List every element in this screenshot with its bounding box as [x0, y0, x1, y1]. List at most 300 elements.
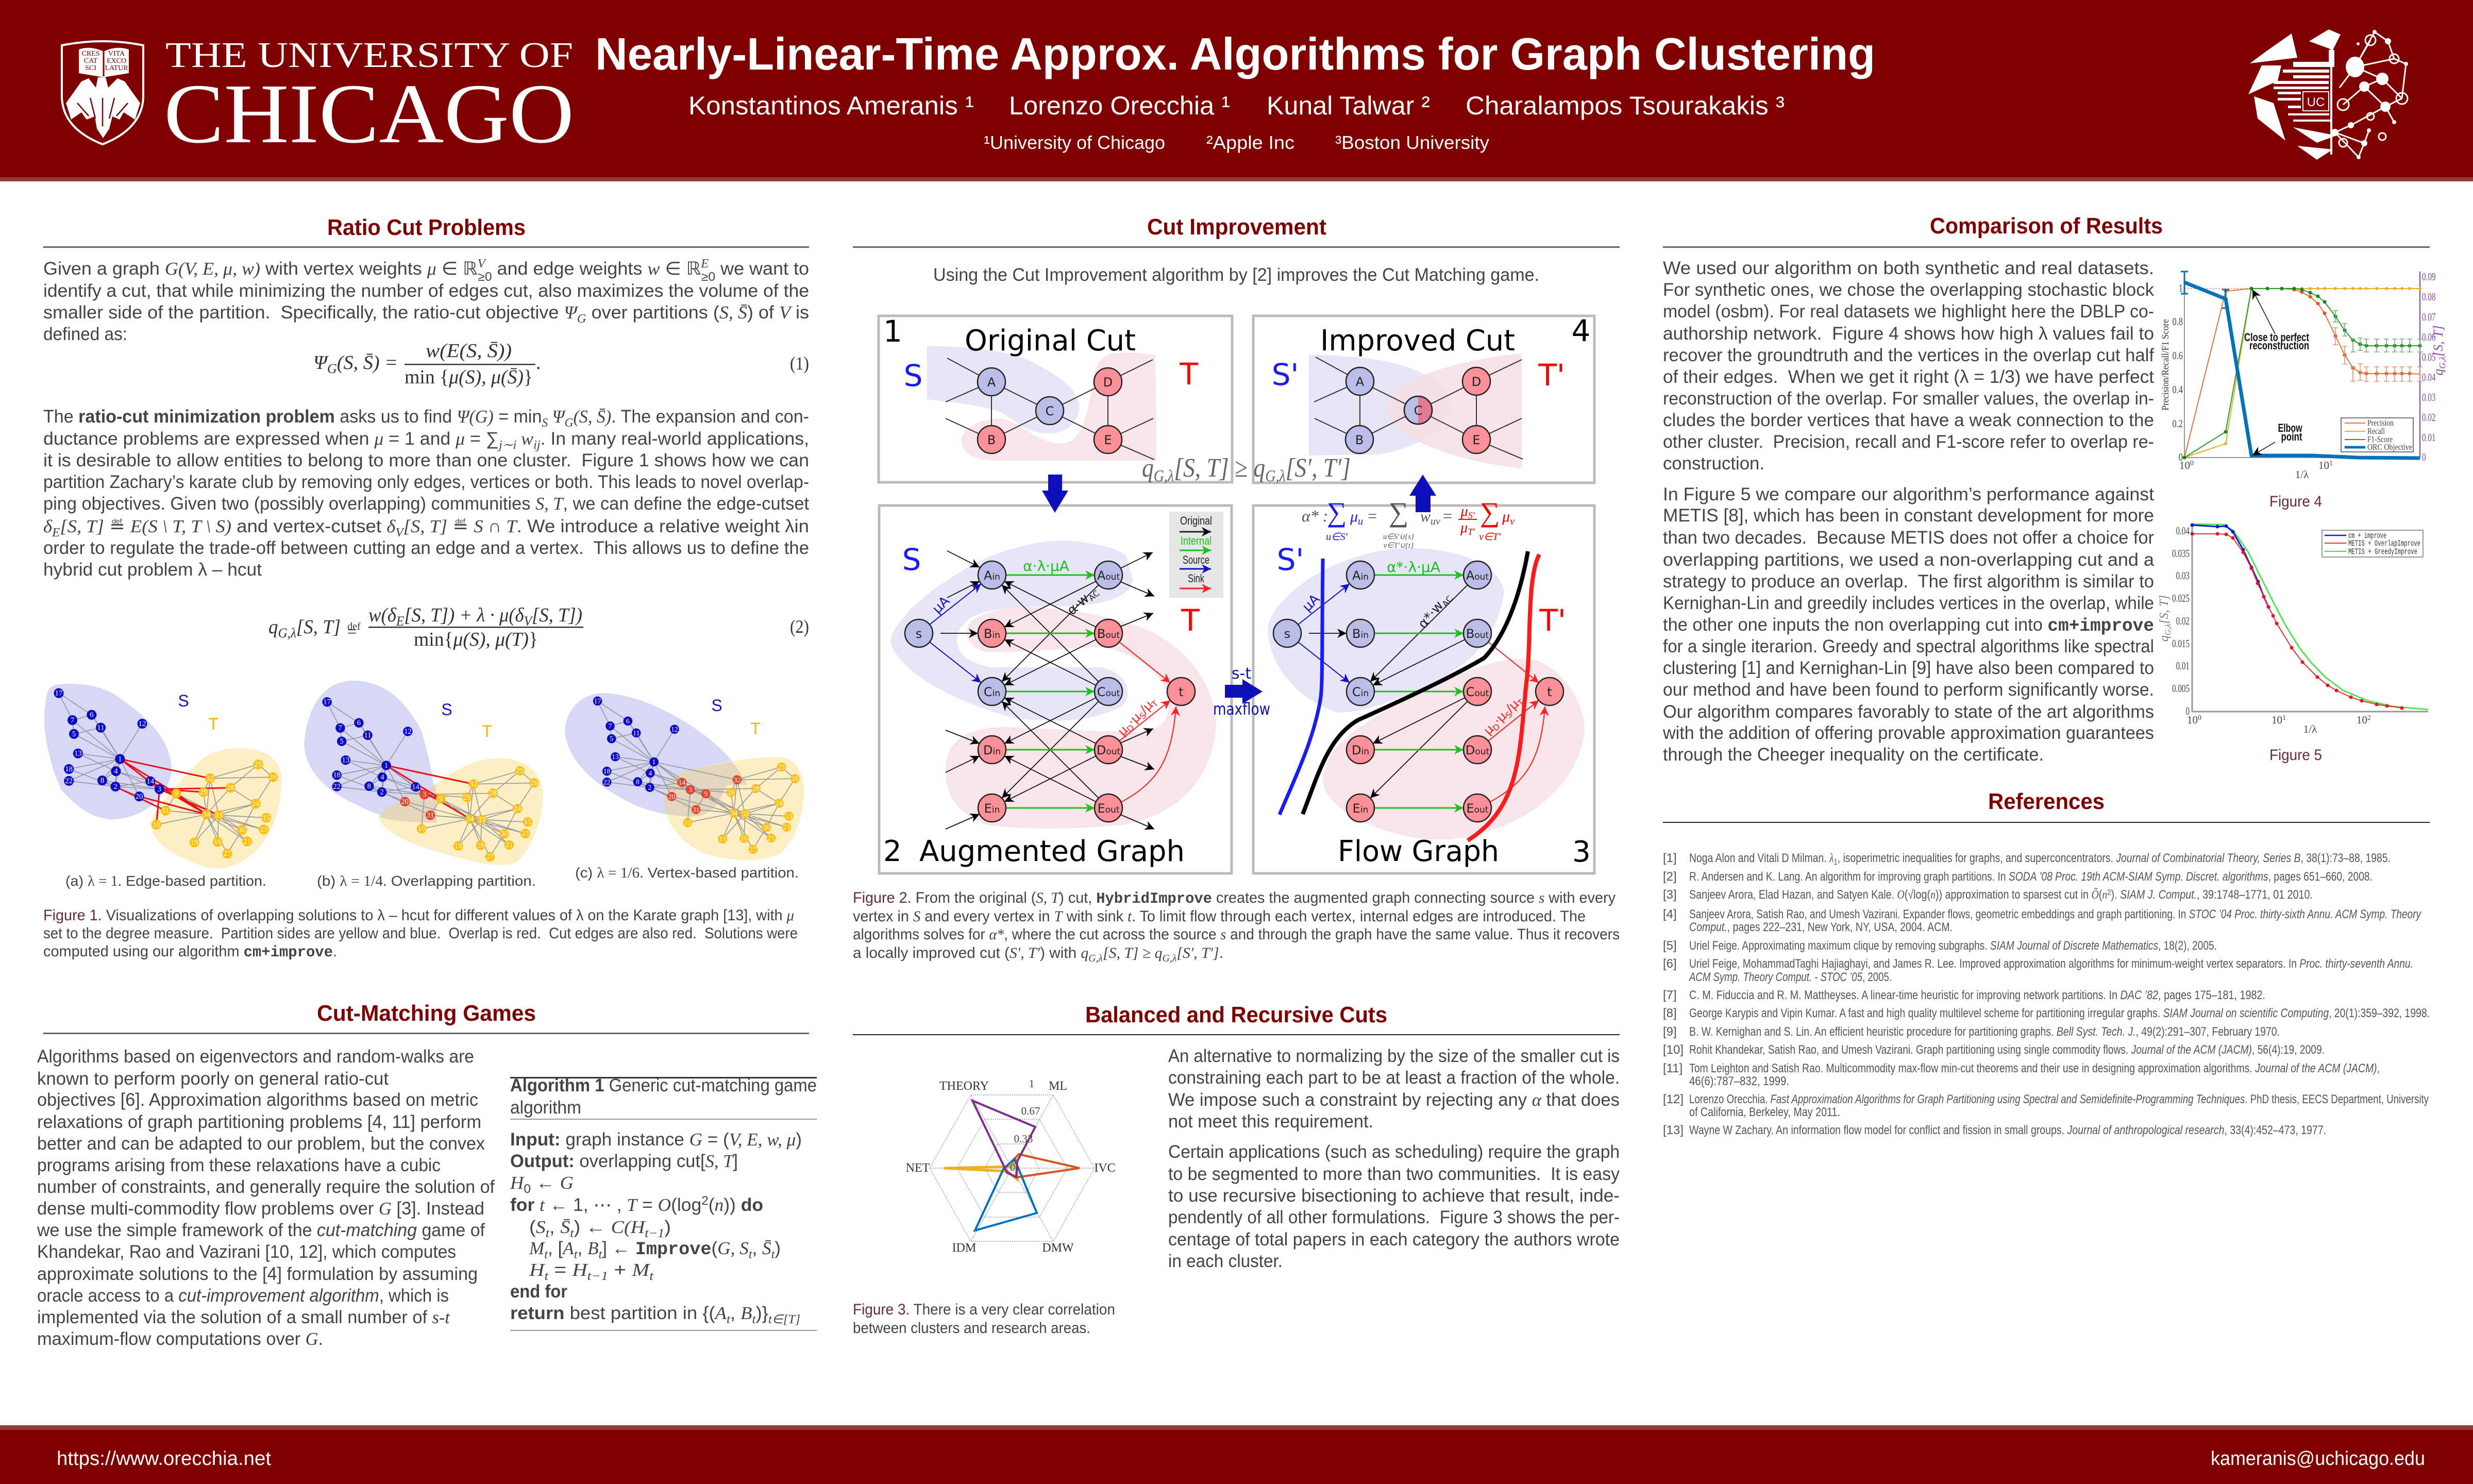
text block: intro paragraph: G — [577, 312, 586, 326]
diagram: flow graph: Dout — [1466, 743, 1489, 757]
radar chart: THEORY — [939, 1080, 989, 1093]
text block: cut-matching description: we use the simple framework of the cut-matching game of — [37, 1220, 485, 1240]
arrow: s-t maxflow: s-t — [1232, 665, 1251, 683]
text block: intro paragraph: and edge weights — [492, 259, 647, 279]
reference list: [3] — [1663, 888, 1677, 902]
text block: ratio-cut minimization: The ratio-cut minimization problem asks us to find Ψ(G) = min — [43, 407, 543, 427]
diagram: improved cut: A — [1356, 375, 1365, 389]
equation 1: Ψ — [313, 352, 327, 374]
diagram: augmented graph: α·λ·μA — [1023, 558, 1069, 575]
text block: ratio-cut minimization: . In many real-world applications, — [541, 429, 809, 449]
equation 2: [S, T]) — [532, 604, 582, 626]
algorithm box: for t ← 1, ⋯ , T = O(log — [510, 1195, 701, 1215]
chart: figure 5 cut quality curves: 10 — [2187, 714, 2198, 726]
chart: figure 4 precision recall and objective: 1/λ — [2295, 468, 2309, 481]
icon: university shield: LATUR — [105, 64, 128, 72]
caption: figure 1: Figure 1. Visualizations of overlapping solutions to λ – hcut for different values of λ on the Karate graph [13], with μ — [43, 907, 794, 924]
diagram: flow graph: Cin — [1352, 685, 1369, 699]
diagram: augmented graph: Bin — [984, 627, 1000, 641]
diagram: augmented graph: Cout — [1097, 685, 1120, 699]
algorithm box: H — [571, 1260, 588, 1280]
left axis ticks: 0.4 — [2173, 384, 2183, 396]
reference list: ). — [2111, 888, 2120, 902]
diagram: flow graph: Ain — [1352, 568, 1369, 583]
diagram: augmented graph: t — [1179, 685, 1184, 699]
caption: figure 1: set to the degree measure. Partition sides are yellow and blue. Overlap is red. Cut edges are also red. Solutions were — [43, 925, 798, 942]
text block: results paragraph 2: strategy to produce an overlap. The first algorithm is similar to — [1663, 571, 2154, 592]
labels S and T: S — [711, 696, 722, 715]
text block: results paragraph 1: other cluster. Precision, recall and F1-score refer to overlap re- — [1663, 432, 2154, 452]
diagram: flow graph: S' — [1277, 542, 1304, 577]
diagram: flow graph: Din — [1352, 743, 1369, 757]
radar chart: 0.33 — [1014, 1133, 1033, 1145]
algorithm box: Improve(G, S — [635, 1238, 748, 1260]
radar chart: 1 — [1029, 1077, 1034, 1090]
caption: figure 4: Figure 4 — [2269, 493, 2322, 510]
diagram: improved cut: 4 — [1572, 313, 1590, 348]
caption: figure 2 — [853, 889, 1620, 964]
figure 1: karate graph partitions — [44, 681, 804, 889]
diagram: augmented graph: D — [1125, 723, 1136, 734]
algorithm box: (S — [529, 1217, 545, 1237]
annotation: close to perfect reconstruction: reconstruction — [2249, 339, 2309, 352]
diagram: flow graph: Ein — [1353, 801, 1368, 816]
arrow: down from original cut to augmented graph — [1042, 475, 1068, 513]
right axis ticks: 0.01 — [2422, 432, 2435, 444]
text block: results paragraph 1 — [1663, 258, 2154, 474]
affiliations: ¹University of Chicago — [984, 132, 1165, 153]
icon: university shield: SCI — [85, 64, 96, 72]
left axis ticks: 0.6 — [2173, 350, 2183, 362]
text block: intro paragraph: over partitions ( — [586, 302, 719, 323]
text block: ratio-cut minimization: (S, S̄) — [573, 407, 611, 427]
diagram: improved cut — [1253, 313, 1594, 483]
equation: cut quality comparison: G,λ — [1154, 466, 1174, 485]
equation 2: q — [268, 616, 278, 638]
diagram: original cut: S — [904, 358, 922, 393]
algorithm box: , — [730, 1303, 741, 1323]
diagram: flow graph: α*·w — [1415, 598, 1447, 632]
diagram: augmented graph — [879, 505, 1232, 873]
text block: cut-matching description: relaxations of graph partitioning problems [4, 11] perform — [37, 1112, 481, 1132]
diagram: improved cut: T' — [1538, 358, 1565, 393]
caption: figure 5: Figure 5 — [2269, 747, 2322, 764]
equation: alpha star — [1302, 497, 1515, 550]
text block: intro paragraph: we want to — [715, 259, 809, 279]
caption: figure 2: Figure 2. From the original (S, T) cut, HybridImprove creates the augmented graph connecting source s with every — [853, 889, 1616, 908]
caption: figure 2: algorithms solves for α*, where the cut across the source s and through the graph have the same value. Thus it recovers — [853, 926, 1620, 943]
reference list: [8] — [1663, 1006, 1677, 1020]
diagram: flow graph: T' — [1539, 603, 1566, 638]
wordmark: CHICAGO — [164, 66, 574, 161]
text block: cut-matching description: Algorithms based on eigenvectors and random-walks are — [37, 1047, 474, 1067]
text block: intro paragraph: smaller side of the partition. Specifically, the ratio-cut objective Ψ — [43, 302, 577, 323]
text block: ratio-cut minimization: δ — [43, 516, 53, 536]
right axis ticks: 0.04 — [2422, 372, 2435, 383]
axis ticks: 0 — [2185, 705, 2190, 717]
diagram: augmented graph: Ein — [984, 801, 1000, 816]
authors: Konstantinos Ameranis ¹ — [688, 91, 974, 120]
text block: cut-matching description: known to perform poorly on general ratio-cut — [37, 1069, 389, 1089]
authors — [688, 91, 1785, 120]
cut curves — [1280, 551, 1539, 840]
text block: results paragraph 2: clustering [1] and Kernighan-Lin [9] have also been compared to — [1663, 658, 2154, 678]
algorithm box: M — [631, 1260, 650, 1280]
arrow: up from flow graph to improved cut — [1409, 475, 1436, 512]
algorithm box: Algorithm 1 Generic cut-matching game — [510, 1075, 817, 1095]
equation: cut quality comparison: G,λ — [1265, 466, 1286, 485]
reference list — [1663, 851, 2430, 1137]
reference list: George Karypis and Vipin Kumar. A fast and high quality multilevel scheme for partitioning irregular graphs. SIAM Journal on scientific Computing, 20(1):359–392, 1998. — [1689, 1006, 2430, 1020]
chart: figure 5 cut quality curves: 10 — [2357, 714, 2367, 726]
axis ticks: 0.015 — [2172, 638, 2190, 650]
panel: Balanced and Recursive Cuts — [853, 1002, 1620, 1337]
right axis ticks: 0.08 — [2422, 291, 2435, 303]
diagram: augmented graph: Cin — [984, 685, 1000, 699]
algorithm box: t — [570, 1227, 575, 1240]
arrow: s-t maxflow: maxflow — [1213, 699, 1270, 719]
left axis ticks: 0.8 — [2173, 316, 2183, 328]
reference list: C. M. Fiduccia and R. M. Mattheyses. A linear-time heuristic for improving network partitions. In DAC ’82, pages 175–181, 1982. — [1689, 988, 2265, 1002]
labels S and T: T — [482, 722, 492, 740]
chart: overlapping partition graph b: 31 — [427, 811, 434, 819]
text block: cut-matching description: dense multi-commodity flow problems over G [3]. Instead — [37, 1199, 484, 1219]
equation 1: w(E(S, S̄)) — [426, 340, 512, 362]
chart: vertex-based partition graph c: 3 — [688, 786, 692, 794]
diagram: augmented graph: μ — [1115, 723, 1131, 738]
reference list: SIAM J. Comput., 39:1748–1771, 01 2010. — [2120, 888, 2338, 902]
text block: intro paragraph: w ∈ ℝ — [647, 259, 700, 279]
footer url: https://www.orecchia.net — [57, 1448, 271, 1470]
legend: Sink — [1188, 572, 1205, 585]
chart: overlapping partition graph b: 20 — [401, 798, 409, 806]
legend — [2341, 418, 2413, 452]
right axis ticks: 0.02 — [2422, 412, 2435, 424]
diagram: original cut: A — [987, 375, 996, 390]
algorithm box: t−1 — [645, 1227, 664, 1240]
chart: vertex-based partition graph c — [565, 693, 804, 861]
right axis ticks: 0.07 — [2422, 311, 2435, 323]
text block: balanced cuts: to use recursive bisectioning to achieve that result, inde- — [1168, 1186, 1620, 1206]
diagram: flow graph — [1253, 497, 1594, 873]
diagram: flow graph: Cout — [1466, 685, 1489, 699]
diagram: original cut: D — [1103, 375, 1113, 390]
axis ticks: 0.005 — [2172, 683, 2190, 695]
equation: alpha star: α* : — [1302, 507, 1328, 525]
equation 1: (S, S̄) = — [337, 352, 398, 374]
equation: alpha star: ∑ — [1327, 497, 1347, 528]
reference list: [12] — [1663, 1092, 1684, 1106]
algorithm box: t — [599, 1248, 603, 1261]
panel: Cut Improvement — [853, 214, 1620, 964]
subfigure captions: (c) λ = 1/6. Vertex-based partition. — [575, 865, 799, 881]
text block: cut-matching description: maximum-flow computations over G. — [37, 1329, 323, 1349]
equation: alpha star: w — [1420, 508, 1431, 525]
legend: ORC Objective — [2367, 442, 2412, 452]
radar chart: 0 — [1010, 1161, 1015, 1173]
chart: figure 5 cut quality curves: G,λ — [2164, 624, 2173, 635]
chart: figure 4 precision recall and objective: [S, T] — [2431, 325, 2446, 357]
text block: results paragraph 2: Kernighan-Lin and greedily includes vertices in the overlap, while — [1663, 593, 2154, 613]
labels S and T: T — [208, 715, 218, 733]
text block: results paragraph 1: For synthetic ones, we chose the overlapping stochastic block — [1663, 280, 2154, 300]
left axis ticks: 0.2 — [2173, 418, 2183, 430]
diagram: flow graph: Flow Graph — [1338, 835, 1499, 868]
radar chart: IDM — [952, 1241, 976, 1255]
chart: figure 5 cut quality curves: q — [2158, 635, 2171, 642]
text block: cut-matching description: oracle access to a cut-improvement algorithm, which is — [37, 1286, 449, 1306]
algorithm box: , [ — [548, 1238, 563, 1258]
footer band — [0, 1425, 2473, 1484]
diagram: flow graph: /μ — [1503, 697, 1521, 716]
algorithm box: ) — [664, 1217, 671, 1237]
logo: circuit and network emblem: UC — [2307, 95, 2325, 109]
text block: ratio-cut minimization: G — [565, 416, 573, 430]
text block: ratio-cut minimization: j∼i — [497, 439, 516, 452]
left axis ticks: 1 — [2179, 282, 2183, 295]
legend: F1-Score — [2367, 434, 2393, 444]
radar chart: ML — [1049, 1080, 1067, 1093]
algorithm box: t — [771, 1248, 776, 1261]
text block: ratio-cut minimization: ductance problems are expressed when μ = 1 and μ = ∑ — [43, 429, 498, 449]
algorithm box: t — [727, 1313, 731, 1326]
algorithm box: Input: graph instance G = (V, E, w, μ) — [510, 1129, 802, 1150]
chart: figure 4 precision recall and objective: 10 — [2318, 459, 2329, 471]
algorithm box: t−1 — [587, 1270, 608, 1283]
diagram: augmented graph: Bout — [1097, 627, 1120, 641]
equation 2: w(δ — [368, 604, 397, 626]
text block: results paragraph 1: reconstruction of the overlap. For smaller values, the overlap in- — [1663, 389, 2154, 409]
text block: ratio-cut minimization: ≝ S ∩ T. We introduce a relative weight λin — [452, 516, 796, 536]
affiliations — [984, 132, 1489, 153]
equation 2: min{μ(S), μ(T)} — [414, 629, 538, 650]
panel: References — [1663, 789, 2430, 1137]
algorithm box: ← — [531, 1173, 560, 1193]
diagram: flow graph: Aout — [1466, 568, 1489, 583]
algorithm box: = — [548, 1260, 572, 1280]
text block: cut-matching description — [37, 1047, 495, 1349]
text block: ratio-cut minimization: [S, T] — [60, 516, 104, 536]
reference list: [1] — [1663, 851, 1677, 865]
reference list: Lorenzo Orecchia. Fast Approximation Algorithms for Graph Partitioning using Spectral and Semidefinite-Programming Techniques. PhD thesis, EECS Department, University — [1689, 1092, 2429, 1106]
text block: results paragraph 2: METIS [8], which has been in constant development for more — [1663, 505, 2154, 526]
text block: results paragraph 2: for a single iterarion. Greedy and spectral algorithms like spectral — [1663, 636, 2154, 656]
reference list: Sanjeev Arora, Elad Hazan, and Satyen Kale. O(√log(n)) approximation to sparsest cut in Õ(n — [1689, 888, 2122, 902]
diagram: original cut: B — [987, 433, 996, 447]
reference list: [10] — [1663, 1043, 1684, 1057]
reference list: Rohit Khandekar, Satish Rao, and Umesh Vazirani. Graph partitioning using single commodity flows. Journal of the ACM (JACM), 56(4):19, 2009. — [1689, 1043, 2325, 1057]
axis ticks: 0.03 — [2176, 570, 2190, 582]
diagram: flow graph: s — [1284, 627, 1290, 641]
text block: ratio-cut minimization: ≝ E(S \ T, T \ S) and vertex-cutset δ — [109, 516, 395, 536]
text block: ratio-cut minimization: it is desirable to allow entities to belong to more than one cluster. Figure 1 shows how we can — [43, 450, 809, 470]
caption: figure 3: Figure 3. There is a very clear correlation — [853, 1301, 1115, 1318]
diagram: augmented graph: α·w — [1064, 591, 1092, 618]
diagram: augmented graph: Aout — [1097, 568, 1120, 583]
chart: vertex-based partition graph c: 9 — [704, 790, 708, 798]
text block: intro paragraph: identify a cut, that while minimizing the number of edges cut, also maximizes the volume of the — [43, 281, 809, 301]
chart: figure 5 cut quality curves: [S, T] — [2158, 595, 2171, 624]
text block: ratio-cut minimization: [S, T] — [403, 516, 447, 536]
diagram: original cut: E — [1104, 433, 1112, 447]
reference list: ACM Symp. Theory Comput. - STOC ’05, 2005. — [1688, 970, 1892, 984]
equation: alpha star: v∈T'∪{t} — [1384, 542, 1414, 550]
radar chart: NET — [906, 1161, 930, 1175]
reference list: Wayne W Zachary. An information flow model for conflict and fission in small groups. Journal of anthropological research, 33(4):452–473, 1977. — [1689, 1123, 2326, 1137]
reference list: [6] — [1663, 957, 1677, 971]
algorithm box: , — [752, 1238, 762, 1258]
algorithm box: t∈[T] — [768, 1313, 800, 1326]
diagram: improved cut: B — [1355, 433, 1364, 447]
reference list: [4] — [1663, 907, 1677, 921]
authors: Kunal Talwar ² — [1267, 91, 1430, 120]
algorithm box: , — [549, 1217, 560, 1237]
text block: intro paragraph: E — [700, 257, 709, 271]
algorithm box: A — [562, 1238, 574, 1258]
radar chart: IVC — [1094, 1161, 1116, 1175]
chart: figure 5 cut quality curves: 0 — [2198, 714, 2201, 722]
reference list: of California, Berkeley, May 2011. — [1689, 1105, 1840, 1119]
diagram: flow graph: AC — [1440, 594, 1455, 609]
equation: alpha star: = — [1443, 507, 1452, 525]
legend — [2322, 530, 2423, 557]
chart: overlapping partition graph b: 3 — [423, 790, 426, 799]
caption: figure 2: vertex in S and every vertex in T with sink t. To limit flow through each vertex, internal edges are introduced. The — [853, 908, 1586, 925]
right axis ticks: 0.06 — [2422, 331, 2435, 343]
reference list: 2 — [2107, 888, 2111, 897]
algorithm box: t — [574, 1248, 578, 1261]
legend: Internal — [1181, 534, 1212, 547]
equation 2: E — [396, 614, 404, 629]
diagram: augmented graph: S — [902, 542, 921, 577]
annotation: elbow point: Elbow — [2278, 421, 2302, 434]
labels S and T: S — [441, 700, 452, 719]
text block: balanced cuts: to be segmented to more than two communities. It is easy — [1168, 1164, 1620, 1184]
equation 2: = — [347, 622, 357, 640]
text block: ratio-cut minimization: hybrid cut problem λ – hcut — [43, 560, 262, 580]
panel: Ratio Cut Problems — [43, 215, 809, 962]
text block: balanced cuts: An alternative to normalizing by the size of the smaller cut is — [1168, 1046, 1620, 1066]
text block: results paragraph 2: the other one inputs the non overlapping cut into cm+improve — [1663, 615, 2154, 636]
heading: References — [1988, 789, 2105, 814]
equation: alpha star: uv — [1431, 516, 1440, 527]
reference list: Journal of Combinatorial Theory, Series B, 38(1):73–88, 1985. — [2116, 851, 2412, 865]
equation: alpha star: u∈S' — [1326, 531, 1348, 543]
diagram: flow graph: D — [1491, 722, 1502, 733]
diagram: augmented graph: AC — [1087, 588, 1101, 603]
diagram: augmented graph: S — [1137, 711, 1148, 721]
text block: balanced cuts: centage of total papers in each category the authors wrote — [1168, 1229, 1620, 1250]
equation 1: min {μ(S), μ(S̄)} — [405, 366, 533, 388]
equation 2: (2) — [790, 616, 809, 637]
algorithm box: , — [578, 1238, 587, 1258]
heading: Balanced and Recursive Cuts — [1085, 1002, 1387, 1027]
algorithm box: S̄ — [762, 1238, 771, 1258]
reference list: Noga Alon and Vitali D Milman. λ — [1689, 851, 1859, 865]
chart: vertex-based partition graph c: 32 — [733, 776, 741, 784]
text block: results paragraph 1: of their edges. When we get it right (λ = 1/3) we have perfect — [1663, 367, 2154, 387]
axis ticks: 0.035 — [2172, 548, 2190, 560]
text block: ratio-cut minimization: partition Zachary’s karate club by removing only edges, vertices or both. This leads to novel overlap- — [43, 472, 809, 492]
affiliations: ³Boston University — [1335, 132, 1489, 153]
algorithm box: H — [510, 1173, 525, 1193]
right axis ticks: 0.05 — [2422, 351, 2435, 363]
chart: figure 5 cut quality curves: 10 — [2272, 714, 2282, 726]
caption: figure 3: between clusters and research areas. — [853, 1320, 1090, 1337]
diagram: flow graph: 3 — [1572, 835, 1591, 869]
equation 1: . — [536, 352, 541, 374]
diagram: augmented graph: μA — [930, 593, 953, 617]
annotation: close to perfect reconstruction: Close to perfect — [2244, 331, 2310, 344]
text block: cut-matching description: programs arising from these relaxations have a cubic — [37, 1155, 441, 1175]
algorithm box: 2 — [701, 1194, 709, 1208]
legend: cm + improve — [2348, 531, 2386, 541]
diagram: flow graph: Bout — [1466, 627, 1489, 641]
chart: figure 5 cut quality curves — [2158, 524, 2428, 735]
text block: ratio-cut minimization: ping objectives. Given two (possibly overlapping) communities S, T, we can define the edge-cutset — [43, 494, 809, 514]
heading: Cut-Matching Games — [317, 1001, 536, 1026]
text block: intro paragraph: Given a graph G(V, E, μ, w) with vertex weights μ ∈ ℝ — [43, 259, 476, 279]
equation 2: G,λ — [278, 626, 296, 640]
annotation: elbow point: point — [2281, 430, 2302, 443]
reference list: Tom Leighton and Satish Rao. Multicommodity max-flow min-cut theorems and their use in designing approximation algorithms. Journal of the ACM (JACM), — [1689, 1061, 2380, 1075]
reference list: [2] — [1663, 870, 1677, 884]
reference list: [5] — [1663, 939, 1677, 953]
chart: overlapping partition graph b — [304, 681, 543, 865]
text block: balanced cuts: We impose such a constraint by rejecting any α that does — [1168, 1090, 1620, 1110]
algorithm box: B — [587, 1238, 599, 1258]
heading: Cut Improvement — [1147, 214, 1326, 240]
icon: university shield: VITA — [108, 50, 125, 58]
diagram: improved cut: C — [1414, 403, 1422, 418]
title: Nearly-Linear-Time Approx. Algorithms for Graph Clustering — [595, 28, 1875, 79]
legend: METIS + GreedyImprove — [2348, 547, 2417, 556]
reference list: Sanjeev Arora, Satish Rao, and Umesh Vazirani. Expander flows, geometric embeddings and graph partitioning. In STOC ’04 Proc. thirty-sixth Annu. ACM Symp. Theory — [1689, 907, 2422, 921]
text block: intro sentence: Using the Cut Improvement algorithm by [2] improves the Cut Matching game. — [933, 265, 1539, 285]
text block: results paragraph 1: We used our algorithm on both synthetic and real datasets. — [1663, 258, 2154, 278]
algorithm box — [510, 1075, 817, 1331]
equation: alpha star: μ — [1460, 520, 1468, 536]
equation: alpha star: u∈S'∪{s} — [1383, 533, 1414, 541]
algorithm box: S̄ — [560, 1217, 570, 1237]
chart: figure 5 cut quality curves: 1 — [2282, 714, 2286, 722]
reference list: [9] — [1663, 1025, 1677, 1039]
diagram: augmented graph: s — [916, 627, 922, 641]
caption: figure 1: computed using our algorithm cm+improve. — [43, 943, 337, 962]
subfigure captions: (b) λ = 1/4. Overlapping partition. — [317, 873, 536, 889]
diagram: augmented graph: 2 — [883, 835, 902, 868]
reference list: 46(6):787–832, 1999. — [1689, 1074, 1789, 1088]
chart: figure 4 precision recall and objective: 10 — [2179, 459, 2190, 471]
axis ticks: 0.04 — [2176, 525, 2190, 537]
caption: figure 2: [S′, T′] — [1176, 945, 1219, 962]
diagram: improved cut: E — [1472, 433, 1481, 447]
text block: ratio-cut minimization: S — [542, 416, 548, 430]
text block: balanced cuts: pendently of all other formulations. Figure 3 shows the per- — [1168, 1207, 1620, 1227]
caption: figure 2: a locally improved cut (S′, T′) with q — [853, 945, 1088, 962]
text block: results paragraph 2 — [1662, 484, 2155, 765]
algorithm box: t — [649, 1270, 654, 1283]
legend: Source — [1183, 553, 1209, 566]
text block: balanced cuts: in each cluster. — [1168, 1251, 1283, 1271]
algorithm box: t — [752, 1313, 756, 1326]
reference list: R. Andersen and K. Lang. An algorithm for improving graph partitions. In SODA ’08 Proc. 19th ACM-SIAM Symp. Discret. algorithms, pages 651–660, 2008. — [1689, 870, 2373, 884]
radar chart — [906, 1077, 1116, 1255]
legend: METIS + OverlapImprove — [2348, 539, 2420, 548]
reference list: [11] — [1663, 1061, 1683, 1075]
text block: results paragraph 2: with the addition of offering provable approximation guarantees — [1662, 723, 2154, 743]
text block: balanced cuts: not meet this requirement. — [1168, 1111, 1373, 1132]
